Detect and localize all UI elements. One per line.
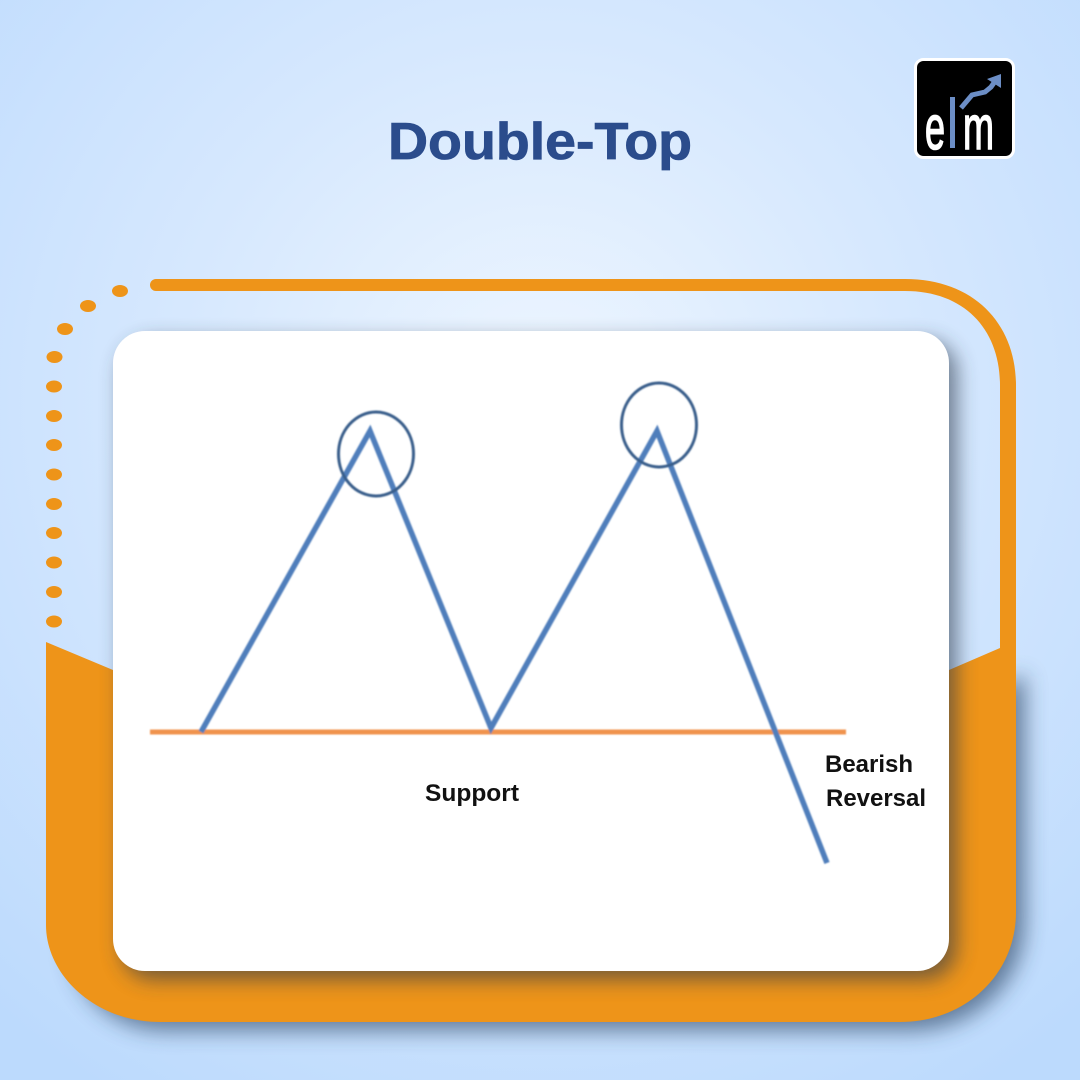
logo: elm: m (963, 94, 994, 163)
circle: first peak (338, 412, 414, 496)
label: bearish reversal: Reversal (826, 785, 926, 812)
logo: elm: e (925, 94, 945, 163)
frame: dotted corner (46, 285, 128, 628)
support line (150, 730, 846, 734)
card shadow (121, 340, 957, 980)
chart: double-top pattern (150, 383, 846, 863)
panel: white chart card (113, 331, 949, 971)
circle: second peak (622, 383, 696, 467)
label: support: Support (425, 780, 519, 807)
title: Double-Top (388, 113, 692, 171)
frame shadow (69, 674, 1025, 1031)
label: bearish reversal: Bearish (825, 751, 913, 778)
frame: top line, right side and bottom block (46, 279, 1016, 1022)
logo: elm (916, 60, 1014, 163)
orange frame (46, 279, 1016, 1022)
price line (201, 431, 827, 863)
